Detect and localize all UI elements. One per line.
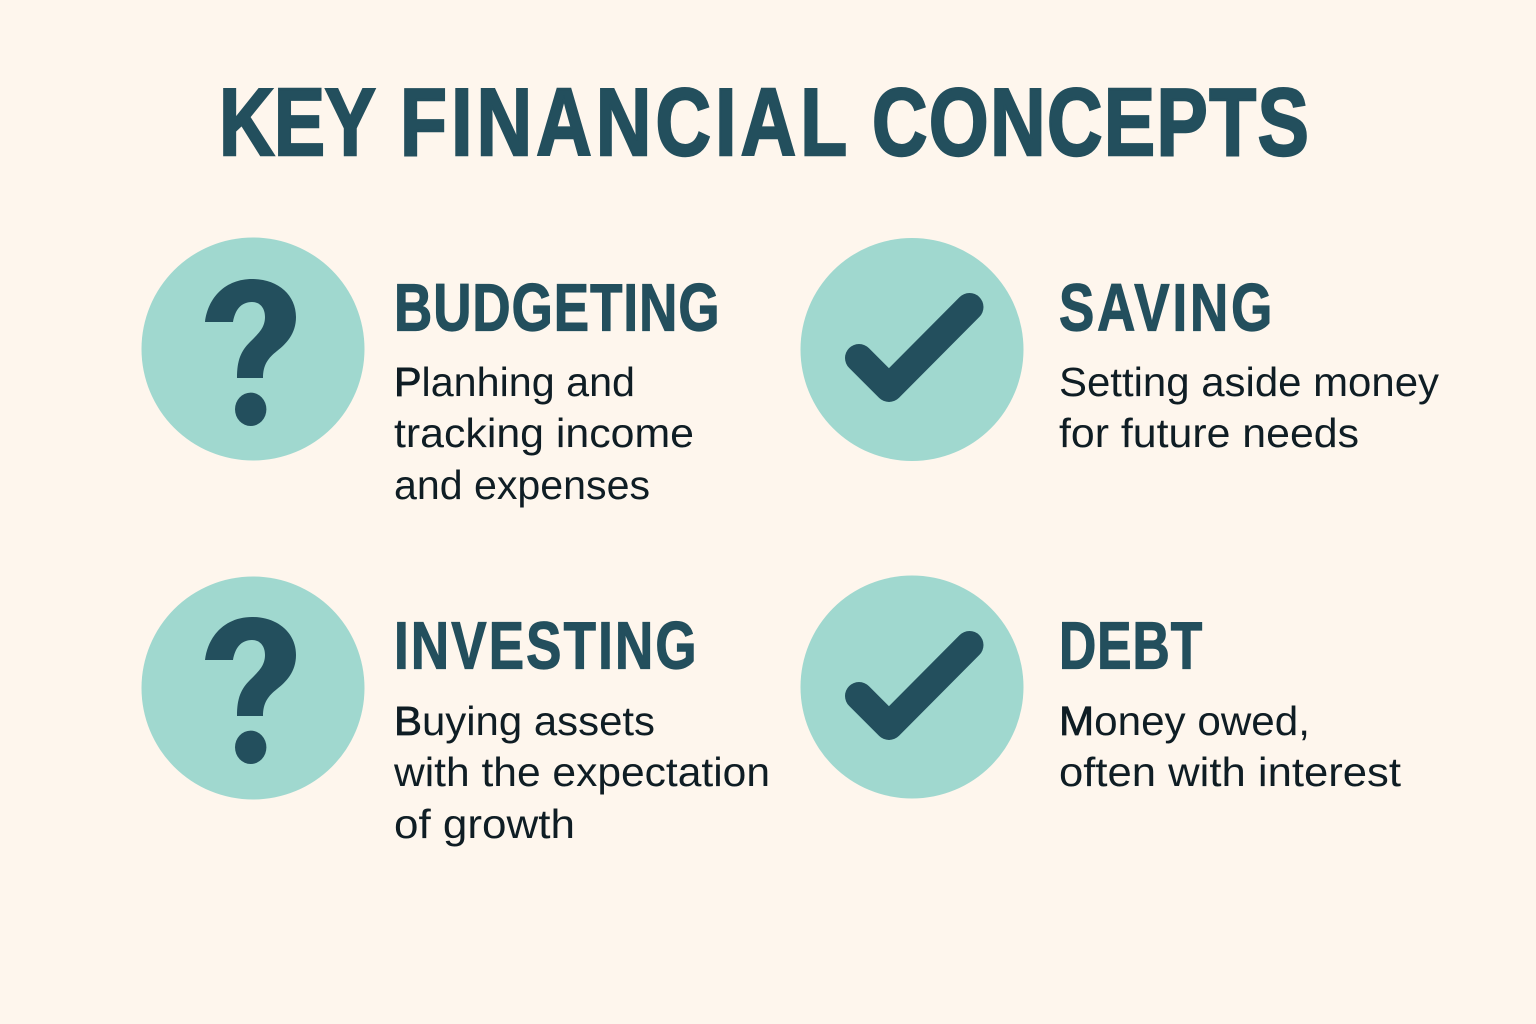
panel: budgeting: [142, 238, 719, 508]
heading: budgeting: BUDGETING: [394, 269, 719, 345]
title: KEY: [219, 69, 376, 176]
heading: saving: SAVING: [1059, 269, 1272, 345]
heading: debt: DEBT: [1059, 608, 1202, 683]
description: budgeting: Planhing and: [394, 359, 635, 405]
description: saving: Setting aside money: [1059, 359, 1439, 405]
title: FINANCIAL: [400, 69, 847, 176]
description: debt: often with interest: [1059, 749, 1402, 795]
description: investing: with the expectation: [393, 749, 770, 795]
description: investing: [393, 698, 770, 847]
description: saving: [1059, 359, 1439, 456]
description: debt: [1059, 698, 1402, 795]
icon: check mark in circle: [800, 238, 1024, 461]
description: budgeting: and expenses: [394, 462, 650, 508]
description: investing: Buying assets: [394, 698, 655, 744]
icon: question mark in circle: [142, 238, 364, 460]
panel: saving: [800, 238, 1439, 461]
description: saving: for future needs: [1059, 410, 1359, 456]
icon: check mark in circle: [800, 576, 1024, 798]
title: CONCEPTS: [872, 69, 1309, 176]
description: debt: Money owed,: [1059, 698, 1310, 744]
description: budgeting: [394, 359, 694, 508]
panel: investing: [142, 576, 770, 847]
heading: investing: INVESTING: [394, 607, 697, 683]
description: investing: of growth: [394, 801, 575, 847]
icon: question mark in circle: [142, 576, 364, 800]
panel: debt: [800, 576, 1402, 798]
description: budgeting: tracking income: [394, 410, 694, 456]
title: [219, 69, 1309, 176]
